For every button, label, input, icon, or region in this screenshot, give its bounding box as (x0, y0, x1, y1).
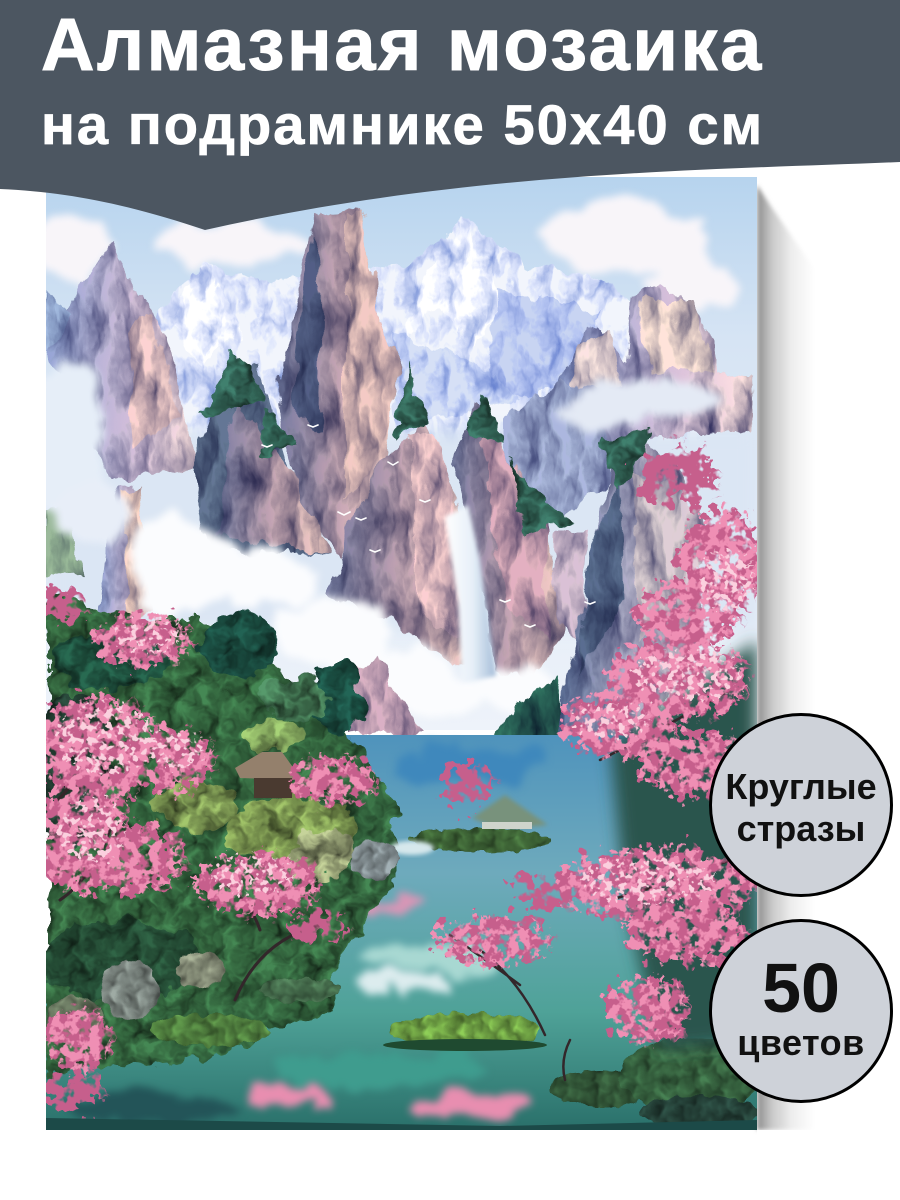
badge: round rhinestones (709, 713, 893, 897)
left stone pillar (98, 485, 140, 619)
waterfall (445, 505, 496, 682)
badge: round rhinestones: Круглые (725, 766, 877, 807)
pines on ridges (205, 350, 650, 535)
branches (50, 690, 757, 1080)
river (46, 735, 757, 1130)
cherry blossoms: highlights (60, 550, 758, 902)
mist behind lower mountains (46, 430, 757, 630)
clouds (30, 365, 725, 715)
cliffs right of waterfall (452, 400, 565, 680)
cherry blossoms: deep tone (35, 445, 767, 1106)
flock of birds (262, 425, 595, 627)
snowy mountains (156, 216, 696, 440)
badge: round rhinestones: стразы (737, 808, 865, 849)
right big cliff (558, 444, 705, 735)
sky (46, 170, 757, 730)
mountains (46, 208, 752, 790)
right peaks (555, 286, 752, 450)
canvas painting with side shadow (46, 177, 804, 1132)
left mountain (50, 245, 200, 480)
subtitle: на подрамнике 50х40 см (41, 93, 764, 156)
temple left (235, 752, 302, 798)
title: Алмазная мозаика (41, 3, 764, 86)
right side dark backing (610, 640, 757, 1050)
foreground banks and rocks (45, 840, 762, 1128)
green valley left (30, 590, 395, 1075)
distant hill and right trees (348, 656, 561, 735)
side shadow (757, 185, 815, 1130)
central tall peak (278, 208, 398, 560)
badge: 50 colours (709, 919, 893, 1103)
dark foreground water edge (46, 1118, 757, 1130)
mid left ridge (190, 360, 330, 555)
cliffs left of waterfall (325, 425, 464, 666)
island with pavilion (390, 795, 550, 855)
badge: 50 colours: цветов (737, 1022, 865, 1063)
badge: 50 colours: 50 (762, 949, 840, 1027)
cherry blossoms: main pink (35, 512, 767, 1070)
